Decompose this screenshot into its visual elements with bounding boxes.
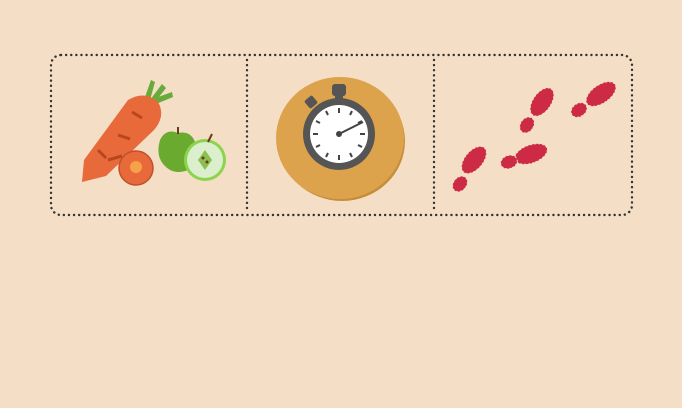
dotted frame [51,55,632,215]
icon: footprints [450,77,620,195]
icon: stopwatch [276,77,405,201]
icon: carrot and apple [82,80,226,185]
